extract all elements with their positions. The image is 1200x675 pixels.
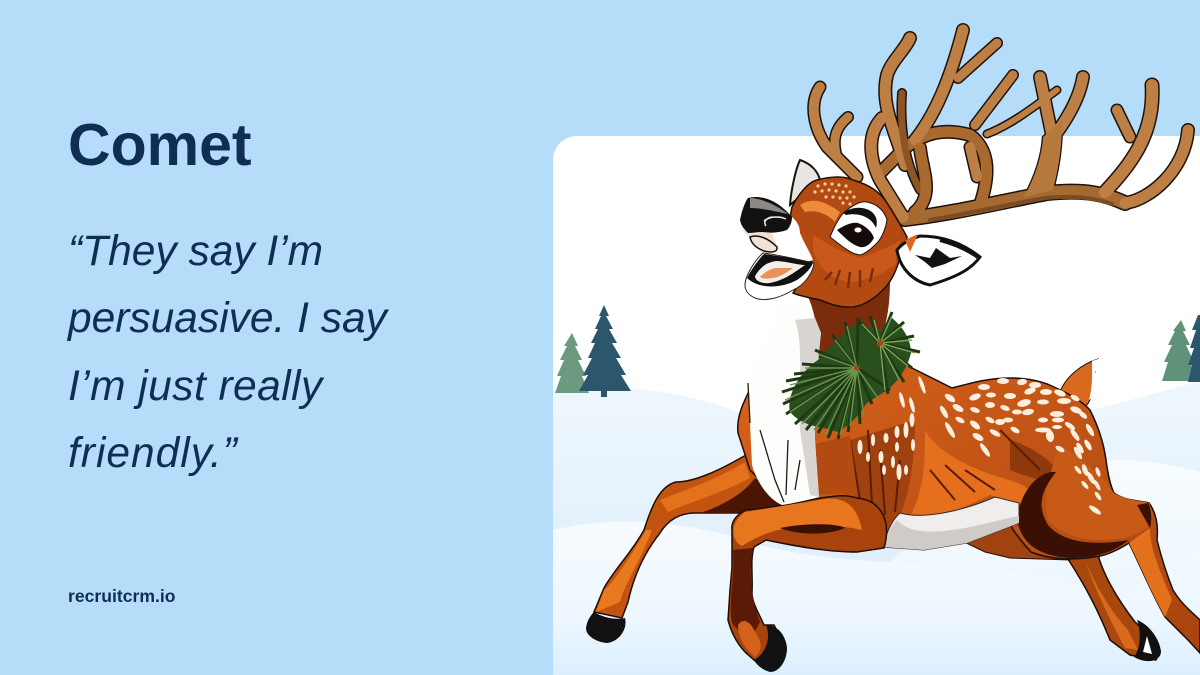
- neck: [805, 280, 890, 365]
- illustration: snowy panel and reindeer: [553, 23, 1200, 675]
- quote text: I’m just really: [68, 363, 323, 410]
- torso and near hind leg: [738, 340, 1200, 653]
- antler outline: [814, 30, 1188, 219]
- tail: [1060, 358, 1101, 406]
- quote text: [67, 228, 389, 477]
- antler fill: [814, 30, 1188, 220]
- panel: white card with snow scene: [553, 136, 1200, 675]
- open mouth: [745, 253, 814, 300]
- back spots: [858, 376, 1103, 516]
- far hind leg: [1066, 555, 1161, 661]
- nose and muzzle: [740, 197, 813, 262]
- white chest fur: [748, 302, 821, 505]
- reindeer: [586, 30, 1200, 672]
- eye: [830, 202, 887, 255]
- far belly: [960, 520, 1070, 560]
- fur shading: [905, 430, 1030, 525]
- pine wreath: [782, 312, 920, 439]
- quote text: friendly.”: [68, 430, 238, 477]
- far front leg: [586, 455, 790, 643]
- shoulder streaks: [898, 392, 906, 408]
- back ear: [790, 160, 820, 205]
- white belly: [882, 497, 1019, 550]
- trees: left group: [555, 305, 631, 397]
- antlers: [814, 30, 1188, 220]
- quote text: persuasive. I say: [68, 295, 387, 342]
- trees: right group: [1162, 315, 1200, 382]
- title: Comet: [68, 112, 252, 178]
- front ear: [897, 234, 980, 285]
- forehead speckles: [813, 182, 856, 206]
- near front leg: [728, 496, 886, 672]
- snow hills: [553, 382, 1200, 675]
- quote text: “They say I’m: [68, 228, 323, 275]
- website url: recruitcrm.io: [68, 586, 176, 606]
- head: [740, 177, 907, 307]
